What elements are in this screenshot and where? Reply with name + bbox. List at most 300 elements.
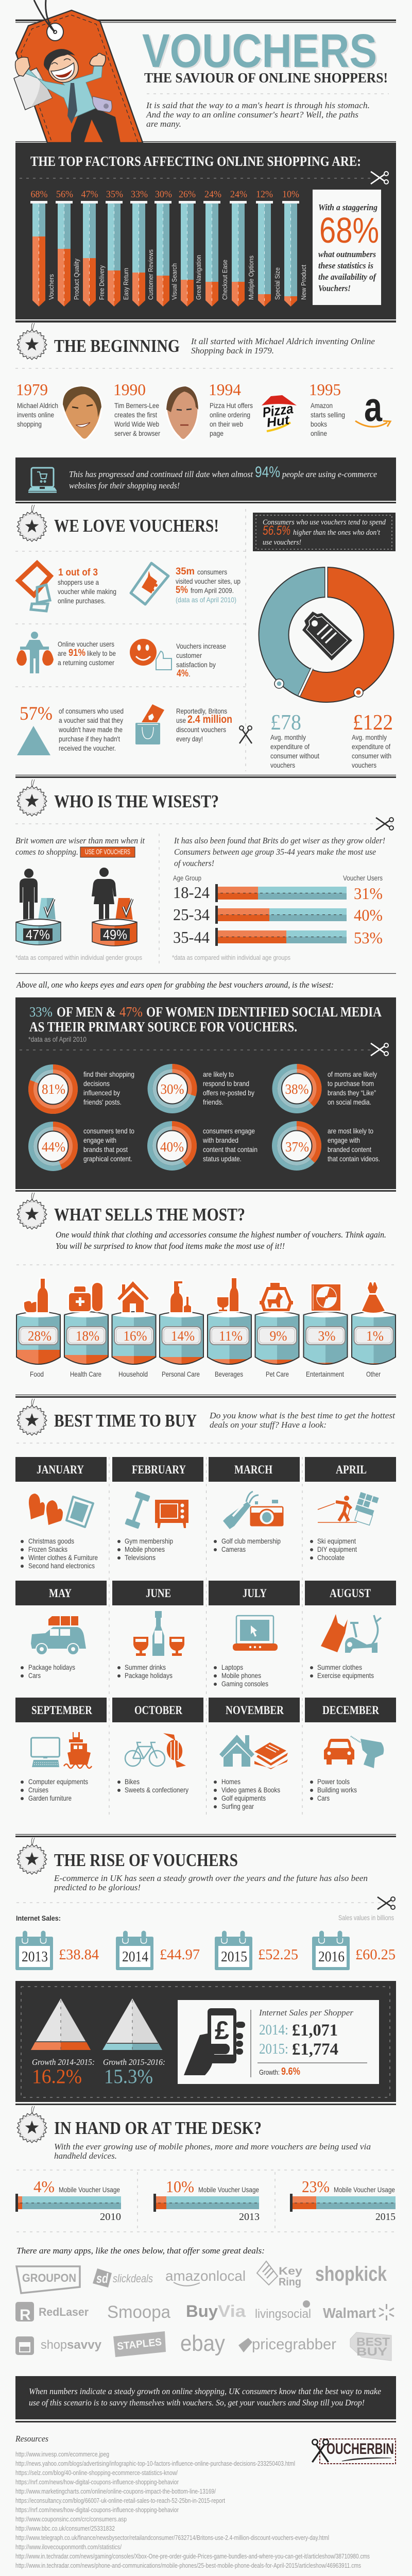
bar chart: factors: Special Size [273,267,281,300]
section: rise of vouchers [15,1838,398,2102]
icons: golf bag and camera [223,1492,284,1529]
month: January: Christmas goods [28,1537,74,1545]
stat donut: 81%: find their shopping [83,1070,134,1078]
chart: age group voucher users [173,874,383,947]
icon: triangle [17,726,50,755]
resources: http://www.marketingcharts.com/online/online-coupons-impact-the-bottom-line-13169/ [15,2487,216,2495]
month: January: JANUARY [37,1463,84,1476]
timeline: 1995: online [311,429,327,437]
stat: 2014 sales: £44.97 [160,1946,200,1963]
stat: 2015 sales: 2015 [221,1949,247,1965]
bar chart: factors: Multiple Options [247,256,255,300]
timeline: 1994: Pizza Hut offers [210,401,253,410]
category: other 1%: Other [366,1370,381,1378]
bar chart: factors: 10% [282,189,299,200]
bar chart: factors: 26% [179,189,196,200]
timeline: 1990: server & browser [114,429,160,437]
month: April: DIY equipment [317,1545,357,1553]
stat: 91% returning customers: Online voucher users [58,640,114,648]
stat: 2.4 million vouchers: use [176,716,186,724]
month: October: Sweets & confectionery [125,1786,188,1794]
stat: 2013 sales [15,1933,99,1970]
bar chart: factors: 33% [131,189,148,200]
timeline: 1995: 1995 [309,380,341,399]
stat: 2.4 million vouchers: Reportedly, Britons [176,707,227,715]
panel heading: OF WOMEN IDENTIFIED SOCIAL MEDIA [146,1004,382,1020]
month: September: Cruises [28,1786,48,1794]
timeline: 1994: online ordering [210,411,250,419]
gender text [15,836,145,857]
triangle: growth 2015-2016: Growth 2015-2016: [103,2057,165,2067]
stat: 57% consumers: of consumers who used [59,707,124,715]
month: March: Cameras [221,1545,246,1553]
stat donut: 30%: 30% [161,1081,184,1097]
note: gender groups: *data as compared within individual gender groups [15,954,142,961]
triangle: growth 2015-2016 [102,1998,165,2088]
bar chart: factors: 12% [256,189,273,200]
timeline: 1979: 1979 [16,380,48,399]
month: January: Second hand electronics [28,1562,95,1570]
chart: mobile usage 2015: 2015 [375,2211,396,2223]
stat: 1 out of 3: voucher while making [58,587,116,596]
stat: £78 without vouchers: vouchers [270,761,295,769]
callout: staggering 68%: these statistics is [318,261,373,270]
stat: 2016 sales: £60.25 [355,1946,396,1963]
badge icon [17,1193,47,1229]
chart: mobile usage 2015 [290,2177,396,2223]
callout text [69,464,377,490]
logo: Shopkick: shopkick [315,2263,387,2285]
resources: http://www.bbc.co.uk/consumer/25331832 [15,2524,115,2532]
section intro [191,336,375,355]
callout text: websites for their shopping needs! [69,481,180,490]
category: entertainment 3% [303,1284,348,1378]
resources: http://www.couponsinc.com/crc/consumers.asp [15,2515,127,2523]
callout: staggering 68%: what outnumbers [318,249,376,259]
title: VOUCHERS [144,26,379,78]
month: February [112,1457,203,1562]
stat: 2013 sales: 2013 [22,1949,48,1965]
stat: 2.4 million vouchers: 2.4 million [187,714,232,725]
month: August: Exercise equipments [317,1671,374,1680]
icon: pet carrier [260,1283,293,1311]
section: what sells the most [16,1193,398,1378]
stat: 2014 sales: 2014 [122,1949,148,1965]
stat: £122 with vouchers: £122 [353,711,393,735]
stat donut: 30%: offers re-posted by [203,1089,254,1097]
icons: dumbbell and television [125,1491,188,1529]
stat: £122 with vouchers: consumer with [352,752,391,760]
badge icon [17,1399,47,1435]
section intro: E-commerce in UK has seen a steady growth over the years and the future has also been [54,1873,368,1883]
icons: house and books [219,1735,288,1769]
bar chart: factors: Product Quality [73,259,80,300]
heading: IN HAND OR AT THE DESK? [54,2118,262,2138]
icon: voucher tag [302,612,352,660]
logo: BuyVia: Buy [186,2302,218,2320]
chart: mobile usage 2013: 2013 [239,2211,260,2223]
age text [174,836,385,868]
stat: 91% returning customers: are [58,649,66,657]
icon: scissors vertical [239,726,252,743]
chart: men pedestal 47% [16,869,61,945]
stat donut: 38%: on social media. [328,1098,371,1106]
stat: 4% satisfaction: Vouchers increase [176,642,226,650]
bar chart: factors: 30% [155,189,172,200]
stat donut: 44%: engage with [83,1136,116,1144]
month: August: AUGUST [330,1587,371,1600]
triangle: growth 2014-2015 [31,1998,95,2088]
category: food 28%: 28% [28,1328,52,1344]
card: internet sales per shopper: 2014: [259,2022,288,2038]
panel heading [28,1004,382,1043]
chart: age group voucher users: 18-24 [173,883,210,902]
label: internet sales: Internet Sales: [16,1914,61,1922]
chart: mobile usage 2010: 2010 [100,2211,121,2223]
month: September [15,1698,107,1802]
gender text: Brit women are wiser than men when it [15,836,145,845]
month: June: Summer drinks [125,1663,166,1671]
month: May [15,1581,107,1680]
category: beverages 11%: 11% [219,1328,243,1344]
stat donut: 44%: brands that post [83,1145,128,1154]
month: February: Televisions [125,1553,156,1562]
stat: 2014 sales [116,1933,200,1970]
stat donut: 81% [31,1067,134,1111]
stat donut: 40%: status update. [203,1155,242,1163]
logo: Groupon [16,2266,80,2293]
chart: mobile usage 2013: 10% [166,2177,194,2196]
month: December: Cars [317,1794,330,1802]
logo: Key Ring [257,2261,302,2288]
logo: Amazon Local: amazonlocal [165,2268,246,2284]
section: who is the wisest [15,779,396,963]
month: April: Chocolate [317,1553,345,1562]
category: beverages 11% [207,1278,252,1378]
icon: scissors [371,1043,388,1056]
stat: £78 without vouchers: expenditure of [270,742,310,751]
category: personal care 14%: 14% [171,1328,195,1344]
chart: mobile usage 2013 [153,2177,260,2223]
logo: Walmart: Walmart [323,2305,376,2321]
month: February: FEBRUARY [132,1463,186,1476]
panel heading: AS THEIR PRIMARY SOURCE FOR VOUCHERS. [29,1019,297,1035]
month: November: Golf equipments [221,1794,266,1802]
chart: age group voucher users: Voucher Users [343,874,383,882]
icon: smiley with thumb [130,639,171,670]
logo: RedLaser [15,2302,89,2324]
section intro: One would think that clothing and accessories consume the highest number of vouchers. Think again. [56,1230,386,1240]
timeline: 1979: shopping [17,420,42,428]
stat donut: 40%: content that contain [203,1145,258,1154]
stat donut: 81%: 81% [42,1081,65,1097]
bar chart: factors: 68% [31,189,48,200]
triangle: growth 2015-2016: 15.3% [104,2065,153,2088]
logo: Slickdeals [93,2268,153,2287]
logo: Pizza Hut: Hut [266,413,291,430]
month: June: JUNE [146,1587,171,1600]
logo: Pizza Hut: Pizza [262,401,294,420]
stat: 4% satisfaction: 4% [177,668,188,679]
category: entertainment 3%: 3% [318,1328,336,1344]
chart: age group voucher users: 35-44 [173,928,210,946]
icon: disc case [312,1284,340,1311]
month: October: Bikes [125,1777,140,1786]
chart: age group voucher users: 40% [354,906,383,924]
timeline: 1990: World Wide Web [114,420,159,428]
stat donut: 30%: friends. [203,1098,224,1106]
stat donut: 37%: branded content [328,1145,371,1154]
stat: 91% returning customers: a returning customer [58,658,114,667]
month: February: Gym membership [125,1537,173,1545]
illustration: orange price tag with happy shopper [14,0,143,143]
month: January [15,1457,107,1570]
stat: 2016 sales: 2016 [318,1949,345,1965]
bar chart: factors: 56% [56,189,73,200]
month: October [112,1698,203,1794]
timeline: 1994: page [210,429,224,437]
timeline: 1994 [209,380,297,437]
month: April: APRIL [336,1463,367,1476]
icon: wine [217,1278,238,1311]
app logos [15,2261,394,2361]
section intro [56,1230,386,1251]
month: April: Ski equipment [317,1537,356,1545]
section intro: deals on your stuff? Have a look: [210,1420,327,1430]
logo: VoucherBin [312,2439,396,2464]
heading: WE LOVE VOUCHERS! [54,516,219,536]
panel: growth [15,1981,396,2102]
month: March: MARCH [234,1463,272,1476]
stat: £78 without vouchers: consumer without [270,752,319,760]
category: other 1% [351,1282,396,1378]
panel: 94% e-commerce [15,457,396,501]
stat: 35m consumers [131,563,241,604]
icon: apple and bottle [24,1279,48,1312]
logo: LivingSocial [255,2300,311,2321]
icons: skier and chocolate [318,1492,379,1526]
stat donut: 81%: decisions [83,1079,110,1088]
stat: 35m consumers: (data as of April 2010) [176,596,236,604]
month: September: Computer equipments [28,1777,88,1786]
chart: mobile usage 2013: Mobile Voucher Usage [198,2185,259,2194]
stat: £78 without vouchers: Avg. monthly [270,733,306,741]
title: VOUCHERS [142,25,377,77]
bar chart: factors: Easy Return [122,268,130,300]
stat: £122 with vouchers: expenditure of [352,742,390,751]
timeline: 1990: Tim Berners-Lee [114,401,159,410]
icon: laptop with cart [28,468,57,493]
card: internet sales per shopper: Internet Sales per Shopper [259,2008,353,2018]
card: internet sales per shopper: £1,071 [292,2021,338,2040]
icons: bicycle and candy [125,1733,186,1768]
section: we love vouchers [15,505,396,771]
note: age groups: *data as compared within individual age groups [172,954,290,961]
triangle: growth 2014-2015: 16.2% [32,2065,82,2088]
bar chart: factors: Checkout Ease [221,260,229,300]
month: November: Homes [221,1777,241,1786]
icons: car with luggage [31,1616,86,1655]
category: food 28% [16,1279,61,1378]
icon: scissors [376,818,393,830]
resources: http://news.yahoo.com/blogs/advertising/infographic-top-10-factors-influence-online-purchase-decisions-233250403.html [15,2460,295,2467]
timeline: 1995: Amazon [311,401,333,410]
panel: closing statement: When numbers indicate a steady growth on online shopping, UK consumers know that the best way to make [29,2386,381,2396]
month: June [112,1581,203,1680]
card: internet sales per shopper: 2015: [259,2041,288,2057]
stat: 4% satisfaction: satisfaction by [176,660,216,669]
section intro: With the ever growing use of mobile phones, more and more vouchers are being used via [54,2142,371,2151]
month: May: Cars [28,1671,41,1680]
logo: Best Buy: BEST [356,2335,390,2348]
heading: THE RISE OF VOUCHERS [54,1850,238,1870]
logo: Staples: STAPLES [116,2336,162,2352]
bar chart: factors: 35% [106,189,123,200]
chart: women pedestal 49% [92,868,137,946]
category: health care 18% [64,1283,109,1378]
category: pet care 9%: 9% [270,1328,287,1344]
stat: 91% returning customers [16,632,116,673]
panel heading: 47% [119,1004,143,1020]
stat: 2.4 million vouchers [135,704,232,744]
callout: staggering 68%: With a staggering [318,202,377,212]
bar chart: factors: Great Navigation [195,255,202,300]
panel heading: 33% [29,1004,53,1020]
icon: lotion and polish [170,1281,191,1312]
category: other 1%: 1% [366,1328,384,1344]
stat: 57% consumers: purchase if they hadn't [59,735,120,743]
age text: Consumers between age group 35-44 years make the most use [174,847,376,857]
month: May: Package holidays [28,1663,75,1671]
resources: http://www.ilovecouponmonth.com/statistics/ [15,2543,122,2551]
callout text: This has progressed and continued till date when almost [69,469,253,479]
chart: age group voucher users: 53% [354,928,383,947]
logo: BuyVia [186,2302,246,2320]
logo: PriceGrabber: pricegrabber [252,2336,336,2353]
chart: age group voucher users: 25-34 [173,905,210,924]
month: September: Garden furniture [28,1794,72,1802]
logo: Best Buy: BUY [356,2345,387,2358]
month: December: DECEMBER [322,1704,379,1717]
stat donut: 30% [150,1066,254,1111]
chart: men pedestal 47%: 47% [26,927,50,942]
card: internet sales per shopper [178,2000,379,2084]
callout: staggering 68%: the availability of [318,272,377,282]
card: internet sales per shopper: £1,774 [292,2040,338,2059]
month: November: NOVEMBER [226,1704,284,1717]
stat: 91% returning customers: likely to be [87,649,116,657]
chart: age group voucher users: Age Group [173,874,201,882]
stat: 2.4 million vouchers: every day! [176,735,203,743]
stat: 57% consumers: received the voucher. [59,744,116,752]
month: July: JULY [243,1587,267,1600]
category: personal care 14%: Personal Care [162,1370,200,1378]
section intro: It all started with Michael Aldrich inventing Online [191,336,375,346]
chart: mobile usage 2015: Mobile Voucher Usage [334,2185,395,2194]
month: December: Building works [317,1786,357,1794]
logo: Slickdeals: slickdeals [113,2272,153,2285]
stat: 4% satisfaction: customer [176,651,202,659]
category: pet care 9%: Pet Care [266,1370,289,1378]
intro text [146,100,370,129]
month: May: MAY [49,1587,72,1600]
resources [15,2434,370,2569]
stat: 57% consumers: 57% [20,703,53,724]
icon: scissors [377,1897,395,1909]
month: July: Laptops [221,1663,243,1671]
stat donut: 38%: to purchase from [328,1079,374,1088]
stat: 2.4 million vouchers: discount vouchers [176,725,226,734]
callout: staggering 68%: 68% [319,210,379,250]
stat: 35m consumers: from April 2009. [191,586,234,595]
timeline: 1979 [16,380,101,439]
category: entertainment 3%: Entertainment [306,1370,344,1378]
heading: WHO IS THE WISEST? [54,791,219,811]
resources: http://www.telegraph.co.uk/finance/newsbysector/retailandconsumer/7632714/Britons-use-2.4-million-discount-vouchers-every-day.html [15,2534,329,2541]
category: beverages 11%: Beverages [215,1370,243,1378]
resources: https://selz.com/blog/40-online-shopping-ecommerce-statistics-know/ [15,2469,178,2477]
callout: 56.5% higher: Consumers who use vouchers tend to spend [263,518,386,527]
category: food 28%: Food [30,1370,44,1378]
callout: 56.5% higher: 56.5% [263,523,290,538]
logo: Slickdeals: sd [96,2270,109,2286]
category: household 16%: 16% [124,1328,147,1344]
tag: use of vouchers: USE OF VOUCHERS [85,848,130,856]
resources: Resources [15,2434,48,2444]
badge icon [17,323,47,360]
bar chart: factors: Customer Reviews [147,249,154,300]
timeline: 1979: Michael Aldrich [17,401,58,410]
bar chart: factors: 24% [230,189,247,200]
stat donut: 38%: brands they “Like” [328,1089,376,1097]
section intro [54,2142,371,2161]
timeline: 1995: books [311,420,327,428]
logo: Amazon: a [364,384,382,430]
stat: 1 out of 3 [19,563,116,611]
icon: medicine [69,1283,102,1311]
stat: 35m consumers: 5% [176,585,188,596]
stat: £122 with vouchers: Avg. monthly [352,733,387,741]
stat donut: 38%: 38% [285,1081,309,1097]
stat: 91% returning customers: 91% [68,648,85,658]
logo: ShopSavvy [15,2336,102,2355]
section: best time to buy [15,1399,398,1818]
stat: 2013 sales: £38.84 [59,1946,99,1963]
timeline: 1990: 1990 [113,380,146,399]
logo: LivingSocial: livingsocial [255,2307,311,2321]
month: November: Surfing gear [221,1802,254,1810]
month: January: Frozen Snacks [28,1545,67,1553]
section: in hand or at the desk [15,2106,398,2419]
logo: BuyVia: Via [218,2302,246,2320]
stat: 4% satisfaction [130,639,226,679]
icons: mittens and tablet [29,1494,93,1527]
callout: 56.5% higher [253,513,396,551]
note: sales values: Sales values in billions [338,1913,394,1922]
text: apps intro: There are many apps, like the ones below, that offer some great deals: [16,2246,265,2256]
icons: vest and exercise bike [321,1614,381,1653]
stat donut: 44%: consumers tend to [83,1127,134,1135]
bar chart: factors: 47% [81,189,98,200]
section intro: Shopping back in 1979. [191,346,274,355]
icon: hand holding phone [184,2008,245,2075]
logo: RedLaser: R [20,2307,31,2324]
stat: 57% consumers: a voucher said that they [59,716,123,724]
icons: computer and ship [31,1732,92,1768]
section intro: You will be surprised to know that food items make the most use of it!! [56,1241,285,1251]
month: June: Package holidays [125,1671,173,1680]
stat: 1 out of 3: online purchases. [58,597,106,605]
